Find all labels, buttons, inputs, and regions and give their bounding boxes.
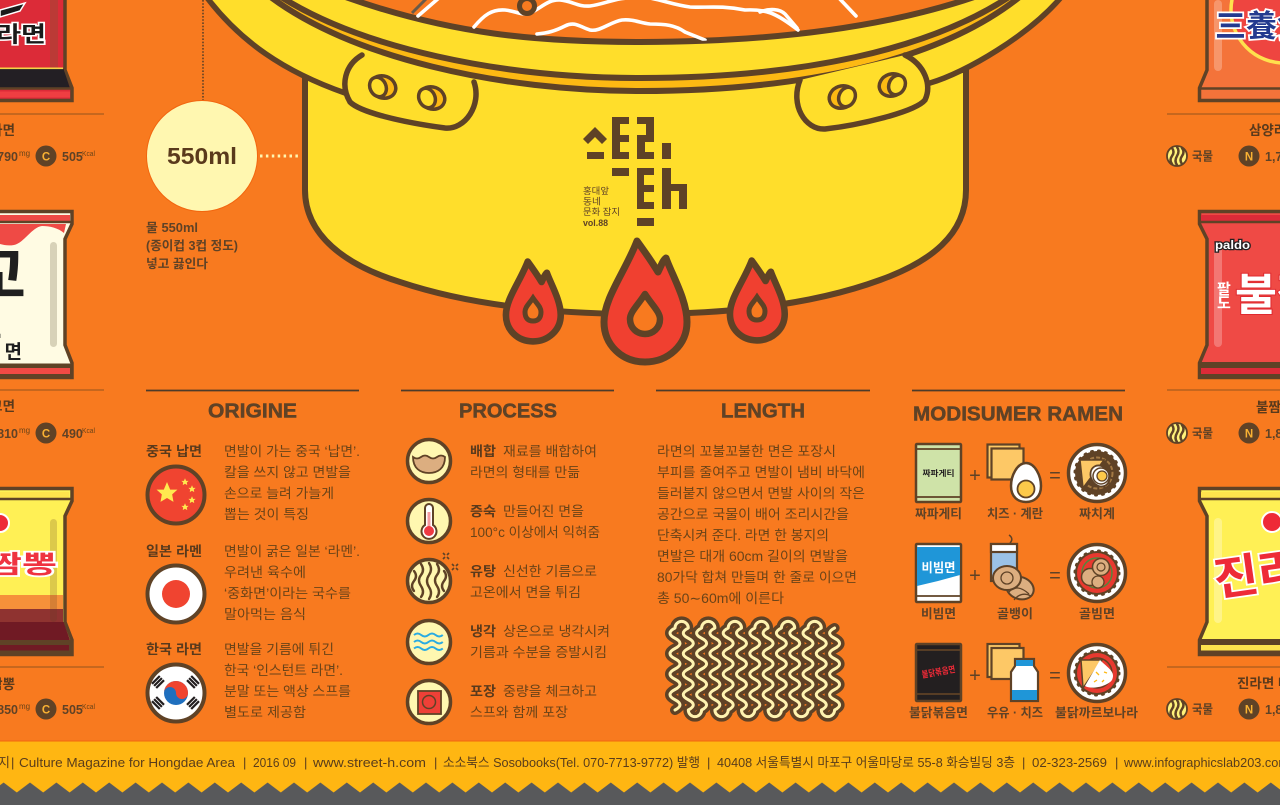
left handle xyxy=(345,55,476,128)
length description: 부피를 줄여주고 면발이 냄비 바닥에 xyxy=(657,465,865,480)
pot interior with noodles xyxy=(340,0,980,42)
footer text: 소소북스 Sosobooks(Tel. 070-7713-9772) 발행 xyxy=(443,755,700,770)
pot body xyxy=(305,70,966,314)
step: frying: 유탕 xyxy=(470,564,497,579)
spec: red ramen: C xyxy=(42,152,50,164)
China origin: 손으로 늘려 가늘게 xyxy=(224,486,334,501)
water amount callout: 넣고 끓인다 xyxy=(146,256,208,271)
packet: Paldo xyxy=(1200,212,1280,378)
heading: ORIGINE: ORIGINE xyxy=(208,400,297,422)
footer text: | xyxy=(434,755,437,770)
recipe row: 불닭까르보나라: 불닭볶음면 xyxy=(909,706,968,720)
pot rim flange xyxy=(205,0,1063,93)
recipe row: 짜치계: + xyxy=(969,465,981,487)
China origin: 칼을 쓰지 않고 면발을 xyxy=(224,465,351,480)
recipe row: 골빔면: 비빔면 xyxy=(921,607,956,621)
step: mixing: 재료를 배합하여 xyxy=(503,444,597,459)
Korea origin xyxy=(146,642,351,722)
panel: LENGTH xyxy=(656,390,870,717)
footer text: Culture Magazine for Hongdae Area xyxy=(19,755,236,770)
recipe row: 불닭까르보나라: 불닭볶음면 xyxy=(921,663,956,680)
spec: yellow ramen: C xyxy=(42,704,50,716)
right column: product packets xyxy=(1167,0,1280,720)
packet: Samyang xyxy=(1200,0,1280,100)
Japan origin xyxy=(146,544,360,622)
spec: yellow ramen: 505 xyxy=(62,703,83,717)
spec: red ramen xyxy=(0,123,95,166)
step: cooling: 기름과 수분을 증발시킴 xyxy=(470,645,607,660)
recipe row: 골빔면 xyxy=(916,535,1126,621)
pot illustration xyxy=(205,0,1063,314)
recipe row: 짜치계: 짜파게티 xyxy=(915,507,962,521)
step: mixing: 라면의 형태를 만듦 xyxy=(470,465,580,480)
recipe row: 불닭까르보나라: 불닭까르보나라 xyxy=(1055,705,1138,720)
step: steaming: 만들어진 면을 xyxy=(503,504,584,519)
step: steaming xyxy=(408,500,600,542)
logo caption: 홍대앞 xyxy=(583,185,609,196)
Japan origin: 말아먹는 음식 xyxy=(224,607,306,622)
panel: MODISUMER RAMEN xyxy=(909,390,1138,720)
footer text: | xyxy=(11,755,14,770)
spec: cream ramen: mg xyxy=(19,426,30,435)
recipe row: 불닭까르보나라: = xyxy=(1049,665,1061,687)
flames xyxy=(506,241,785,362)
large flame xyxy=(604,241,687,362)
step: mixing: 배합 xyxy=(470,444,497,459)
footer text xyxy=(0,755,1280,770)
right handle xyxy=(797,55,928,129)
China origin: 뽑는 것이 특징 xyxy=(224,507,309,522)
spec: yellow ramen xyxy=(0,677,95,720)
spec: yellow ramen: mg xyxy=(19,702,30,711)
recipe row: 골빔면: 비빔면 xyxy=(922,561,956,575)
length description: 단축시켜 준다. 라면 한 봉지의 xyxy=(657,528,829,543)
spec: Paldo: 국물 xyxy=(1192,426,1213,440)
amber rim band xyxy=(268,0,1022,91)
step: cooling: 상온으로 냉각시켜 xyxy=(503,624,610,639)
spec: cream ramen: C xyxy=(42,428,50,440)
step: packing: 스프와 함께 포장 xyxy=(470,705,568,720)
Korea origin: 한국 ‘인스턴트 라면’. xyxy=(224,663,343,678)
recipe row: 골빔면: + xyxy=(969,565,981,587)
China origin xyxy=(146,444,360,524)
step: packing xyxy=(408,680,597,724)
spec: cream ramen: Kcal xyxy=(82,426,95,435)
spec: Jin ramen: 국물 xyxy=(1192,702,1213,716)
China origin: 면발이 가는 중국 ‘납면’. xyxy=(224,444,360,459)
magazine logo xyxy=(583,117,687,228)
right flame xyxy=(730,261,785,340)
water amount callout: 550ml xyxy=(167,143,237,169)
footer text: 02-323-2569 xyxy=(1032,755,1107,770)
logo caption: vol.88 xyxy=(583,218,608,228)
water amount callout xyxy=(146,0,299,271)
spec: Samyang: N xyxy=(1245,152,1253,164)
left flame xyxy=(506,262,561,341)
Korea origin: 분말 또는 액상 스프를 xyxy=(224,684,351,699)
footer text: www.street-h.com xyxy=(312,755,426,770)
spec: cream ramen: 490 xyxy=(62,427,83,441)
rules xyxy=(1167,114,1280,667)
recipe row: 골빔면: 골빔면 xyxy=(1079,607,1115,621)
length description xyxy=(657,444,865,606)
packet: cream ramen xyxy=(0,212,72,378)
step: cooling xyxy=(408,620,610,664)
footer text: | xyxy=(707,755,710,770)
recipe row: 짜치계: 짜치계 xyxy=(1079,507,1115,521)
spec: red ramen: Kcal xyxy=(82,149,95,158)
step: frying xyxy=(408,553,597,602)
spec: Samyang: 국물 xyxy=(1192,150,1213,164)
packet: Jin ramen xyxy=(1200,488,1280,654)
Korea origin: 한국 라면 xyxy=(146,642,202,657)
heading: PROCESS: PROCESS xyxy=(459,400,557,422)
rules xyxy=(0,114,104,667)
footer text: | xyxy=(304,755,307,770)
Japan origin: ‘중화면’이라는 국수를 xyxy=(224,586,351,601)
spec: cream ramen xyxy=(0,399,95,444)
spec: yellow ramen: Kcal xyxy=(82,702,95,711)
step: cooling: 냉각 xyxy=(470,624,497,639)
water amount callout: 물 550ml xyxy=(146,221,198,235)
packet: Paldo: 도 xyxy=(1217,295,1231,312)
footer text: | xyxy=(1022,755,1025,770)
footer band xyxy=(0,741,1280,805)
spec: red ramen: mg xyxy=(19,149,30,158)
recipe row: 골빔면: = xyxy=(1049,565,1061,587)
footer text: | xyxy=(243,755,246,770)
step: steaming: 증숙 xyxy=(470,504,496,519)
heading: LENGTH: LENGTH xyxy=(721,400,805,422)
step: packing: 중량을 체크하고 xyxy=(503,684,597,699)
packet: red ramen xyxy=(0,0,72,100)
length description: 80가닥 합쳐 만들며 한 줄로 이으면 xyxy=(657,570,857,585)
recipe row: 불닭까르보나라: 우유 · 치즈 xyxy=(987,706,1043,720)
step: frying: 신선한 기름으로 xyxy=(503,564,597,579)
length description: 공간으로 국물이 배어 조리시간을 xyxy=(657,507,849,522)
footer text: 40408 서울특별시 마포구 어울마당로 55-8 화승빌딩 3층 xyxy=(717,755,1015,770)
Japan origin: 면발이 굵은 일본 ‘라멘’. xyxy=(224,544,360,559)
logo caption: 문화 잡지 xyxy=(583,206,620,217)
Korea origin: 면발을 기름에 튀긴 xyxy=(224,642,334,657)
spec: Jin ramen: N xyxy=(1245,704,1253,716)
panel: PROCESS xyxy=(401,390,614,724)
Korea origin: 별도로 제공함 xyxy=(224,705,306,720)
spec: Samyang xyxy=(1167,123,1280,166)
recipe row: 짜치계: 치즈 · 계란 xyxy=(987,507,1043,521)
spec: red ramen: 505 xyxy=(62,150,83,164)
step: packing: 포장 xyxy=(470,684,497,699)
recipe row: 짜치계 xyxy=(915,444,1126,521)
water amount callout: (종이컵 3컵 정도) xyxy=(146,239,238,253)
recipe row: 불닭까르보나라: + xyxy=(969,665,981,687)
logo caption xyxy=(583,185,620,228)
length description: 총 50∼60m에 이른다 xyxy=(657,591,785,606)
length description: 라면의 꼬불꼬불한 면은 포장시 xyxy=(657,444,836,459)
footer text: 2016 09 xyxy=(253,755,296,770)
noodle block xyxy=(670,621,840,717)
footer text: | xyxy=(1115,755,1118,770)
recipe row: 불닭까르보나라 xyxy=(909,644,1138,720)
spec: Paldo xyxy=(1167,400,1280,444)
length description: 들러붙지 않으면서 면발 사이의 작은 xyxy=(657,486,865,501)
logo caption: 동네 xyxy=(583,196,601,206)
step: steaming: 100°c 이상에서 익혀줌 xyxy=(470,525,600,540)
length description: 면발은 대개 60cm 길이의 면발을 xyxy=(657,549,848,564)
panel: ORIGINE xyxy=(146,390,360,722)
recipe row: 짜치계: 짜파게티 xyxy=(922,468,954,478)
recipe row: 골빔면: 골뱅이 xyxy=(997,607,1033,621)
spec: Paldo: N xyxy=(1245,428,1253,440)
packet: yellow ramen xyxy=(0,488,72,654)
step: mixing xyxy=(408,440,597,482)
spec: Jin ramen xyxy=(1167,676,1280,720)
Japan origin: 우려낸 육수에 xyxy=(224,565,306,580)
packet: Paldo: paldo xyxy=(1215,240,1250,252)
China origin: 중국 납면 xyxy=(146,444,202,459)
step: frying: 고온에서 면을 튀김 xyxy=(470,585,581,600)
recipe row: 짜치계: = xyxy=(1049,465,1061,487)
heading: MODISUMER RAMEN: MODISUMER RAMEN xyxy=(913,402,1123,426)
Japan origin: 일본 라멘 xyxy=(146,544,202,559)
left column: product packets xyxy=(0,0,104,720)
packet: cream ramen: 면 xyxy=(5,341,22,363)
packet: Paldo: 팔 xyxy=(1217,281,1231,298)
